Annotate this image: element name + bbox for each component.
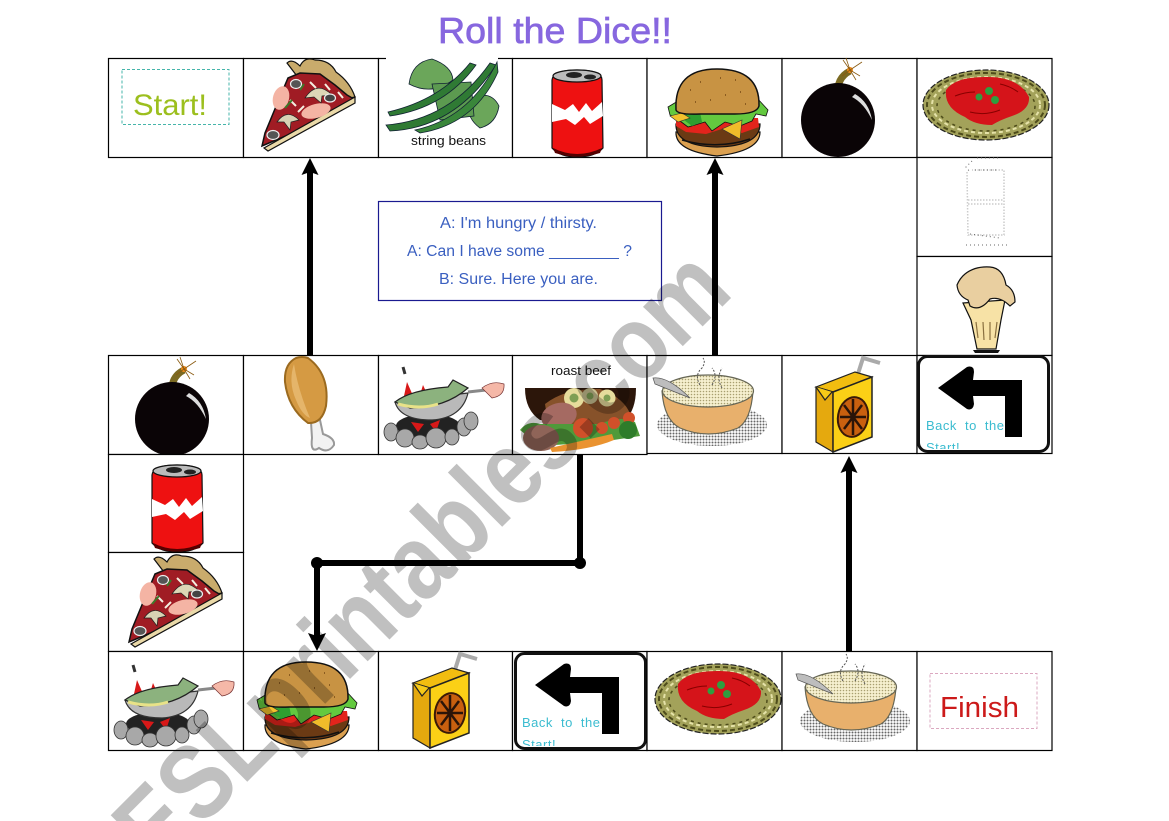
cell: soup bowl	[782, 652, 917, 750]
cell: back to the start sign	[917, 356, 1052, 455]
title: Roll the Dice!!	[438, 10, 672, 51]
cell: start: Start!	[133, 89, 207, 122]
cell: string beans: string beans	[411, 134, 486, 148]
board: middle row	[108, 356, 1052, 456]
board: left column	[108, 454, 244, 652]
cell: finish: Finish	[940, 692, 1019, 724]
arrow: roast beef to burger	[308, 454, 586, 651]
cell: spaghetti	[647, 652, 782, 750]
arrow: soup to juice box	[840, 456, 858, 652]
cell: chicken leg	[244, 356, 378, 454]
cell: soup bowl	[647, 356, 782, 454]
cell: soda can	[108, 454, 244, 552]
cell: pizza	[244, 58, 378, 158]
cell: roast beef: roast beef	[551, 364, 612, 378]
cell: soda can	[512, 58, 647, 158]
cell: juice box	[378, 652, 512, 750]
cell: roast beef	[512, 356, 647, 454]
board: top row	[108, 55, 1052, 158]
dialogue box: B: Sure. Here you are.	[439, 271, 598, 288]
board: bottom row	[108, 652, 1052, 752]
arrow: chicken to pizza	[302, 158, 318, 356]
cell: bomb	[108, 356, 244, 456]
arrow: soup to burger	[706, 158, 724, 356]
cell: back to the start sign: Back to the	[522, 715, 600, 730]
dialogue box	[378, 202, 662, 300]
cell: juice box	[782, 356, 917, 454]
cell: frying fish	[378, 356, 512, 454]
cell: burger	[647, 58, 782, 158]
cell: glass of milk	[917, 158, 1052, 256]
cell: finish	[917, 652, 1052, 750]
cell: ice cream	[917, 256, 1052, 356]
cell: back to the start sign: Start!	[926, 440, 960, 455]
dialogue box: A: Can I have some ________ ?	[407, 243, 632, 260]
cell: frying fish	[108, 652, 244, 750]
cell: back to the start sign: Back to the	[926, 418, 1004, 433]
cell: string beans	[378, 55, 512, 158]
cell: pizza	[108, 552, 244, 652]
cell: spaghetti	[917, 58, 1052, 158]
cell: start	[108, 58, 244, 158]
cell: burger	[244, 652, 378, 750]
dialogue box: A: I'm hungry / thirsty.	[440, 215, 597, 232]
cell: back to the start sign	[512, 652, 647, 752]
cell: bomb	[782, 58, 917, 158]
cell: back to the start sign: Start!	[522, 737, 556, 752]
board: right column	[917, 158, 1052, 356]
